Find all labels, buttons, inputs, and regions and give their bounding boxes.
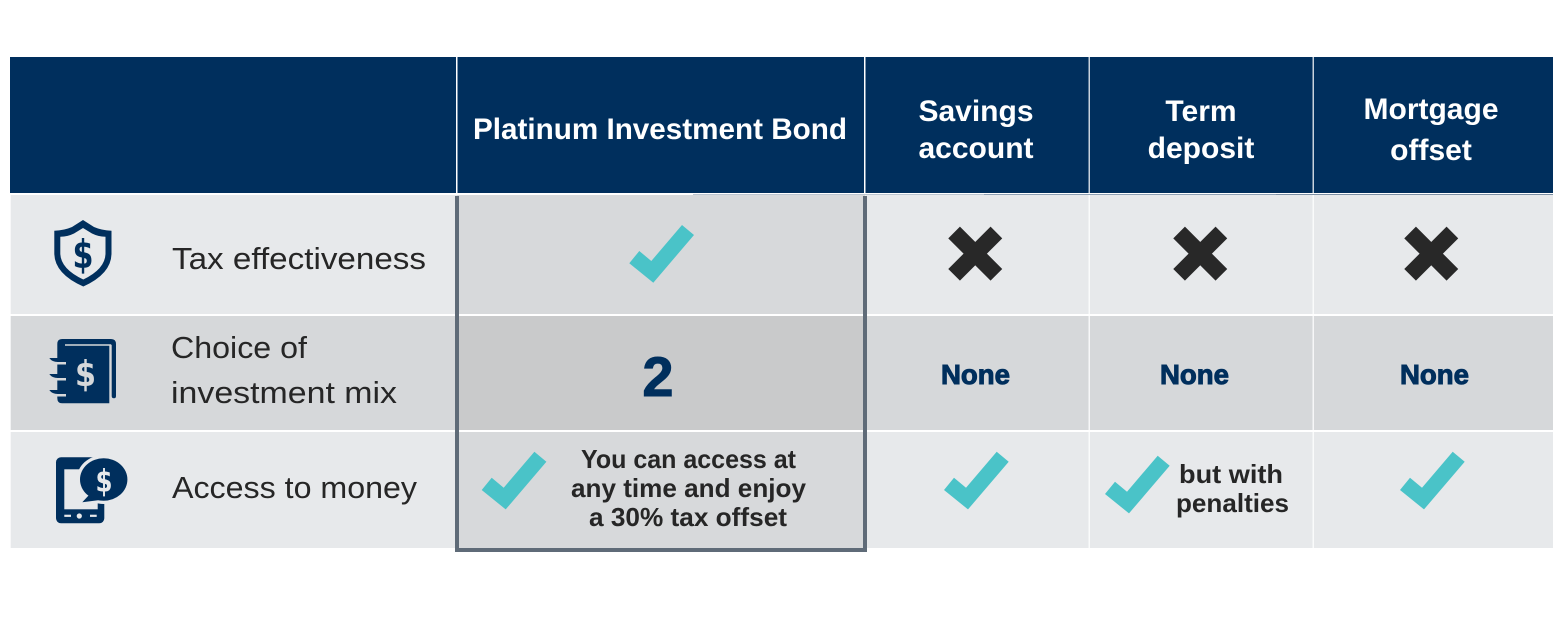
icon: book with dollar: $	[75, 354, 96, 395]
row backgrounds	[11, 194, 1553, 548]
icon: shield with dollar	[54, 220, 112, 286]
text: Platinum access note: You can access at	[581, 444, 796, 474]
text: but with penalties: but with	[1179, 459, 1283, 489]
icon: tick term access	[1105, 456, 1170, 513]
icon: tick Platinum access	[482, 452, 546, 509]
label: Access to money: Access to money	[172, 470, 418, 505]
label: None term: None	[1160, 359, 1229, 390]
heading: Savings account: Savings	[918, 95, 1034, 128]
heading: Mortgage offset: Mortgage	[1364, 93, 1498, 126]
header row	[10, 57, 1553, 193]
label: Choice of investment mix: Choice of	[171, 330, 307, 365]
heading: Term deposit: Term	[1165, 95, 1237, 128]
icon: book with dollar	[49, 339, 116, 403]
icon: phone with speech bubble	[56, 455, 131, 523]
panel: highlighted Platinum Investment Bond column	[457, 195, 865, 550]
icon: tick savings access	[944, 452, 1009, 509]
icon: cross mortgage	[1410, 232, 1452, 275]
icon: shield with dollar: $	[72, 233, 94, 278]
icon: tick Platinum tax	[629, 225, 694, 283]
label: Choice of investment mix: investment mix	[171, 375, 398, 410]
icon: tick mortgage access	[1400, 452, 1465, 509]
text: Platinum access note: a 30% tax offset	[589, 502, 787, 532]
icon: cross savings	[954, 232, 996, 275]
heading: Platinum Investment Bond: Platinum Investment Bond	[473, 113, 847, 146]
icon: phone with speech bubble: $	[96, 464, 112, 500]
label: None savings: None	[941, 359, 1010, 390]
heading: Mortgage offset: offset	[1390, 134, 1472, 167]
label: None mortgage: None	[1400, 359, 1469, 390]
heading: Savings account: account	[918, 132, 1034, 165]
heading: Term deposit: deposit	[1148, 132, 1254, 165]
label: row 2 value 2: 2	[642, 345, 674, 408]
text: Platinum access note: any time and enjoy	[571, 473, 807, 503]
label: Tax effectiveness: Tax effectiveness	[172, 241, 426, 276]
icon: cross term deposit	[1179, 232, 1221, 275]
text: but with penalties: penalties	[1176, 488, 1289, 518]
